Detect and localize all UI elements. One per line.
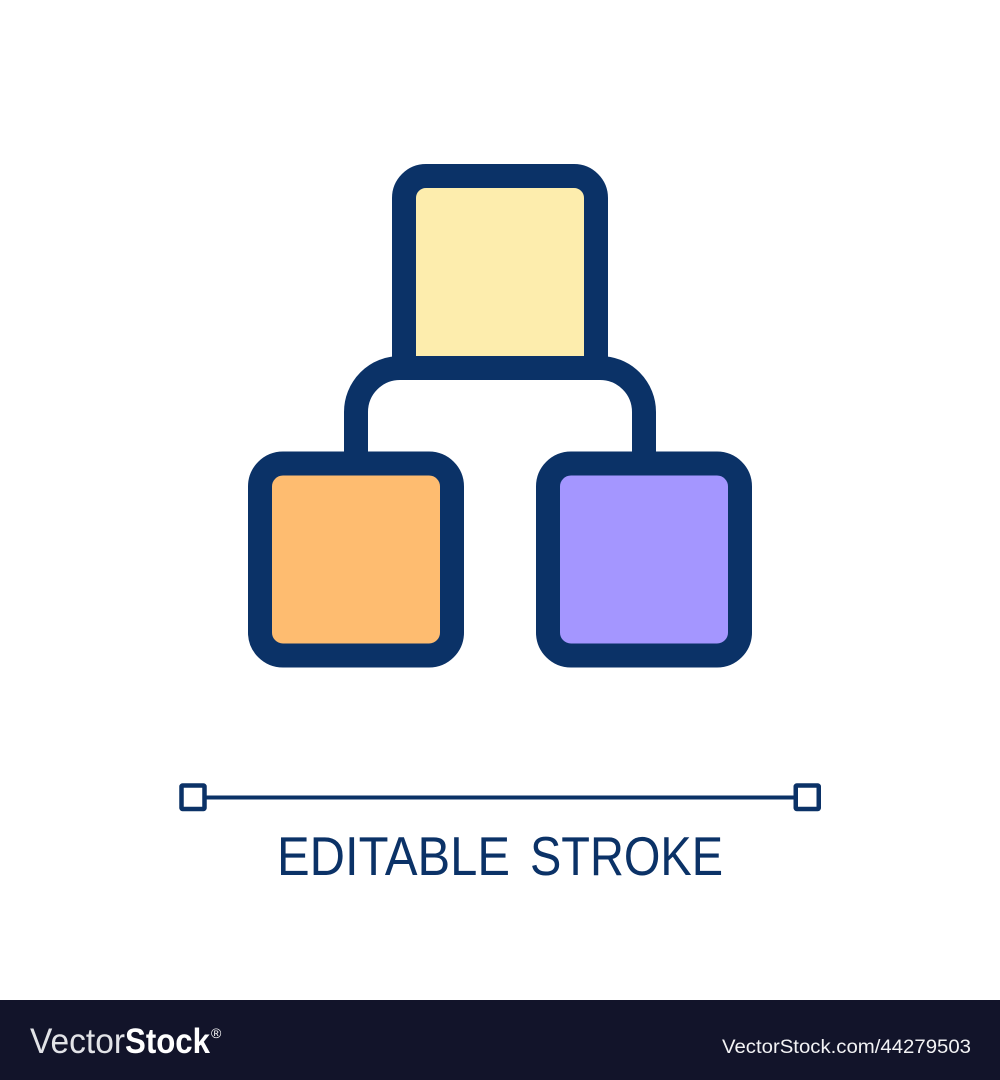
right purple box <box>548 464 740 656</box>
registered mark: ® <box>211 1025 222 1041</box>
footer logo: VectorStock <box>30 1022 222 1061</box>
connector between boxes <box>356 368 644 464</box>
icon: hierarchy diagram <box>260 176 740 656</box>
top yellow box <box>404 176 596 368</box>
slider line <box>205 796 795 800</box>
caption: editable stroke <box>277 825 723 887</box>
left orange box <box>260 464 452 656</box>
editable stroke slider <box>182 786 819 809</box>
caption word: editable: EDITABLE <box>277 825 510 887</box>
left slider handle <box>182 786 204 809</box>
footer image id: VectorStock.com/44279503 <box>722 1037 971 1058</box>
logo word: Stock: Stock <box>125 1022 210 1061</box>
logo word: Vector: Vector <box>30 1022 125 1061</box>
footer bar <box>0 1000 1000 1080</box>
right slider handle <box>796 786 819 809</box>
caption word: stroke: STROKE <box>530 825 723 887</box>
